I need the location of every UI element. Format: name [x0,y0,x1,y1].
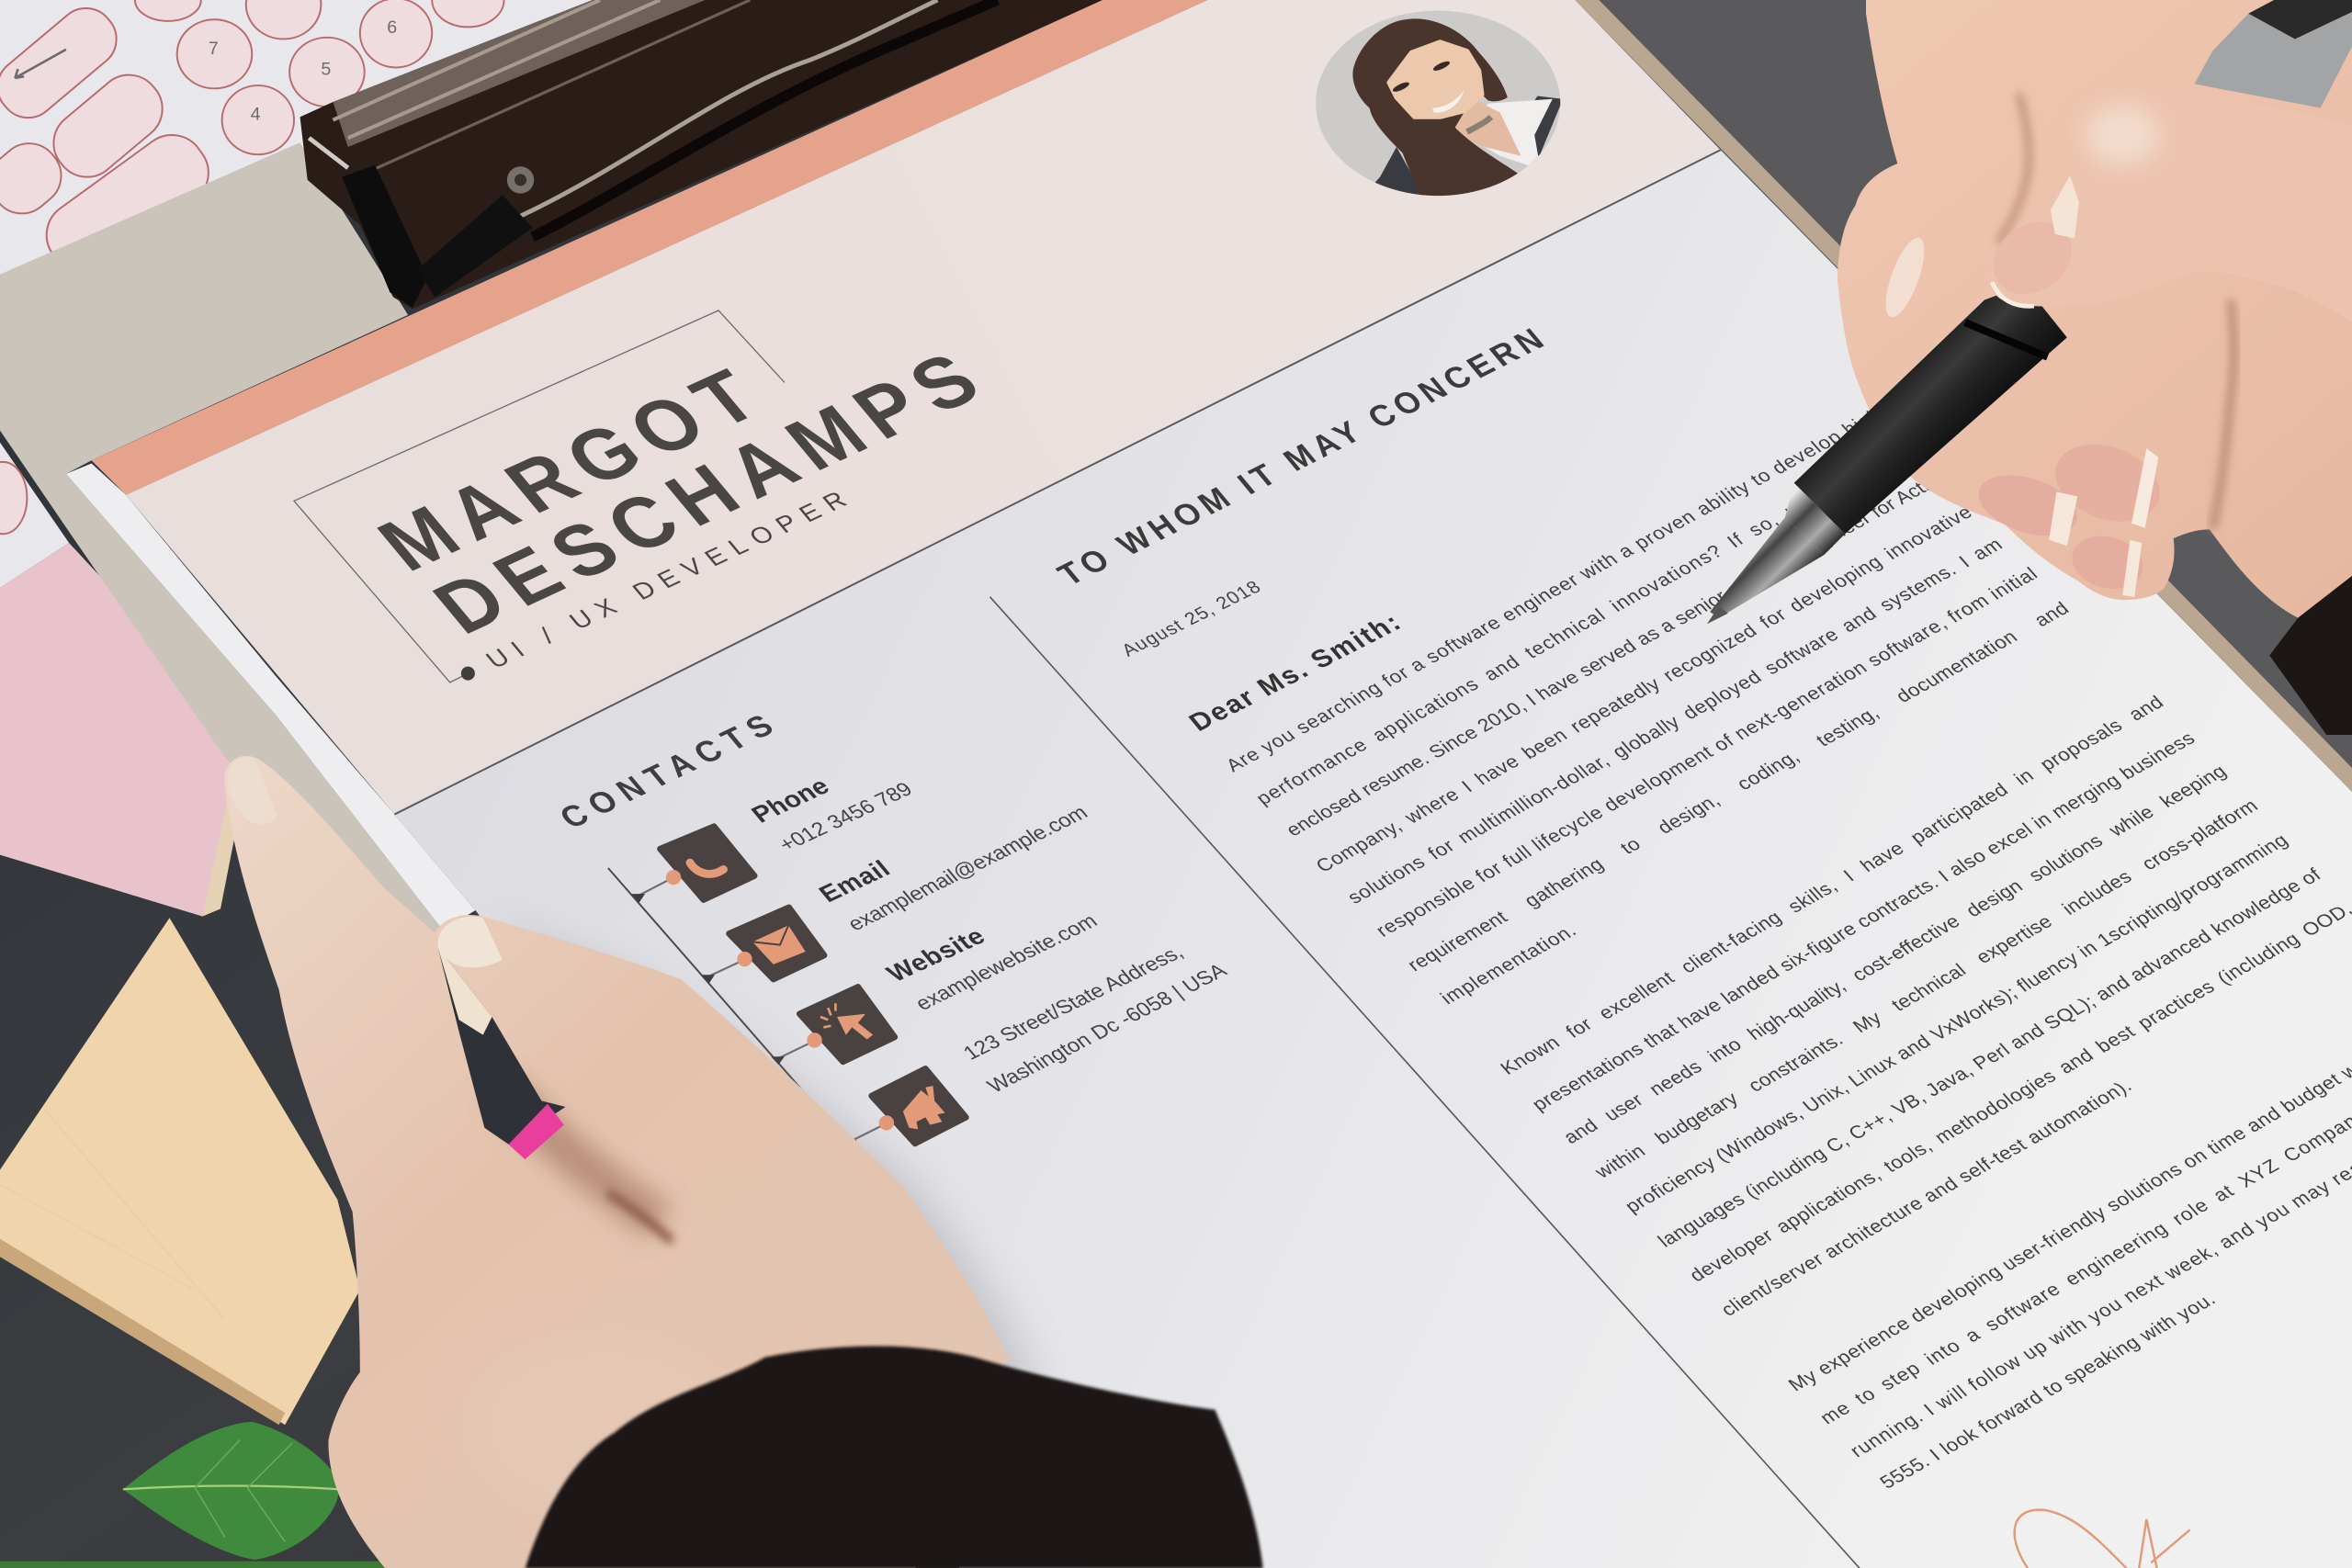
header bottom rule [394,150,1721,815]
left hand [224,756,1008,1568]
contact item: email [701,801,1092,984]
contact item: phone: Phone [746,773,835,828]
green leaf [123,1422,339,1560]
letter paragraph 1 [1222,401,2074,1009]
job title: UI / UX DEVELOPER [481,486,852,673]
keyboard with pink keys: 6 [387,17,397,38]
letter paragraph 1: requirement gathering to design, coding, testing, documentation and [1404,599,2074,976]
contact item: phone [631,773,917,903]
letter paragraph 1: solutions for multimillion-dollar, globally deployed software and systems. I am [1343,535,2007,908]
pen [1707,285,2067,624]
letter paragraph 2: Known for excellent client-facing skills, I have participated in proposals and [1497,693,2167,1078]
panel: salmon header band [92,0,1207,495]
letter paragraph 1: Are you searching for a software engineer with a proven ability to develop high- [1222,401,1894,776]
date: August 25, 2018 [1118,578,1265,660]
contact item: email: examplemail@example.com [842,801,1092,935]
letter paragraph 2: developer applications, tools, methodologies and best practices (including OOD, [1686,899,2352,1286]
name frame with dot [294,310,785,682]
letter paragraph 2: languages (including C, C++, VB, Java, Perl and SQL); and advanced knowledge of [1654,865,2325,1251]
keyboard with pink keys: 5 [321,60,331,80]
pen back end [2195,0,2352,108]
index finger over pen [1979,88,2352,322]
letter paragraph 3: 5555. I look forward to speaking with you. [1876,1290,2220,1493]
page stack edge [66,464,476,930]
keyboard with pink keys: 4 [251,105,261,125]
salutation: Dear Ms. Smith: [1183,608,1407,737]
letter paragraph 2: and user needs into high-quality, cost-effective design solutions while keeping [1560,761,2231,1148]
letter paragraph 2: proficiency (Windows, Unix, Linux and VxWorks); fluency in 1scripting/programming [1621,830,2292,1217]
cream envelope [0,918,360,1425]
felt wrap of clipboard [0,142,443,948]
contact item: address: 123 Street/State Address, [958,941,1188,1064]
contact item: address: Washington Dc -6058 | USA [982,958,1232,1097]
panel: resume page body [394,150,2352,1568]
shadow of left hand on page [495,930,1050,1439]
letter paragraph 2: presentations that have landed six-figure contracts. I also excel in merging business [1528,728,2199,1115]
right hand [1838,0,2352,618]
left sleeve cuff [525,1346,1263,1568]
signature [2015,1510,2190,1568]
contact item: website: Website [881,923,990,987]
clipboard wooden board edge [1575,0,2352,792]
green strip at bottom edge [0,1562,398,1568]
profile photo [1315,10,1563,202]
keyboard with pink keys [0,0,630,588]
panel: pink header [126,0,1721,815]
keyboard with pink keys: 7 [209,39,219,59]
heading: to whom it may concern: TO WHOM IT MAY CONCERN [1051,322,1551,592]
pink sticky notes [0,543,247,917]
contact item: phone: +012 3456 789 [774,778,917,855]
heading: name: DESCHAMPS [417,338,996,649]
letter paragraph 2: client/server architecture and self-test automation). [1717,1076,2136,1320]
heading: contacts: CONTACTS [553,709,781,835]
letter paragraph 2 [1497,693,2352,1320]
cream paper behind sticky note [202,742,240,917]
letter paragraph 2: within budgetary constraints. My technical expertise includes cross-platform [1590,796,2262,1183]
metal clipboard clip [300,0,1102,309]
right sleeve cuff [2269,576,2352,735]
contact item: website [771,909,1102,1065]
contact item: website: examplewebsite.com [910,909,1102,1014]
background: grey surface top right [1560,0,2352,840]
letter paragraph 1: performance applications and technical innovations? If so, please see my [1252,434,1924,809]
contact item: email: Email [813,855,896,908]
letter paragraph 1: responsible for full lifecycle development of next-generation software, from initial [1372,564,2041,941]
column divider [990,597,1860,1568]
letter paragraph 1: enclosed resume. Since 2010, I have served as a senior software engineer for Action [1282,466,1953,840]
contact item: address [843,941,1232,1149]
heading: name: MARGOT [362,355,775,587]
contacts timeline line [608,868,873,1171]
letter paragraph 1: implementation. [1437,920,1580,1009]
letter paragraph 1: Company, where I have been repeatedly recognized for developing innovative [1312,502,1976,876]
